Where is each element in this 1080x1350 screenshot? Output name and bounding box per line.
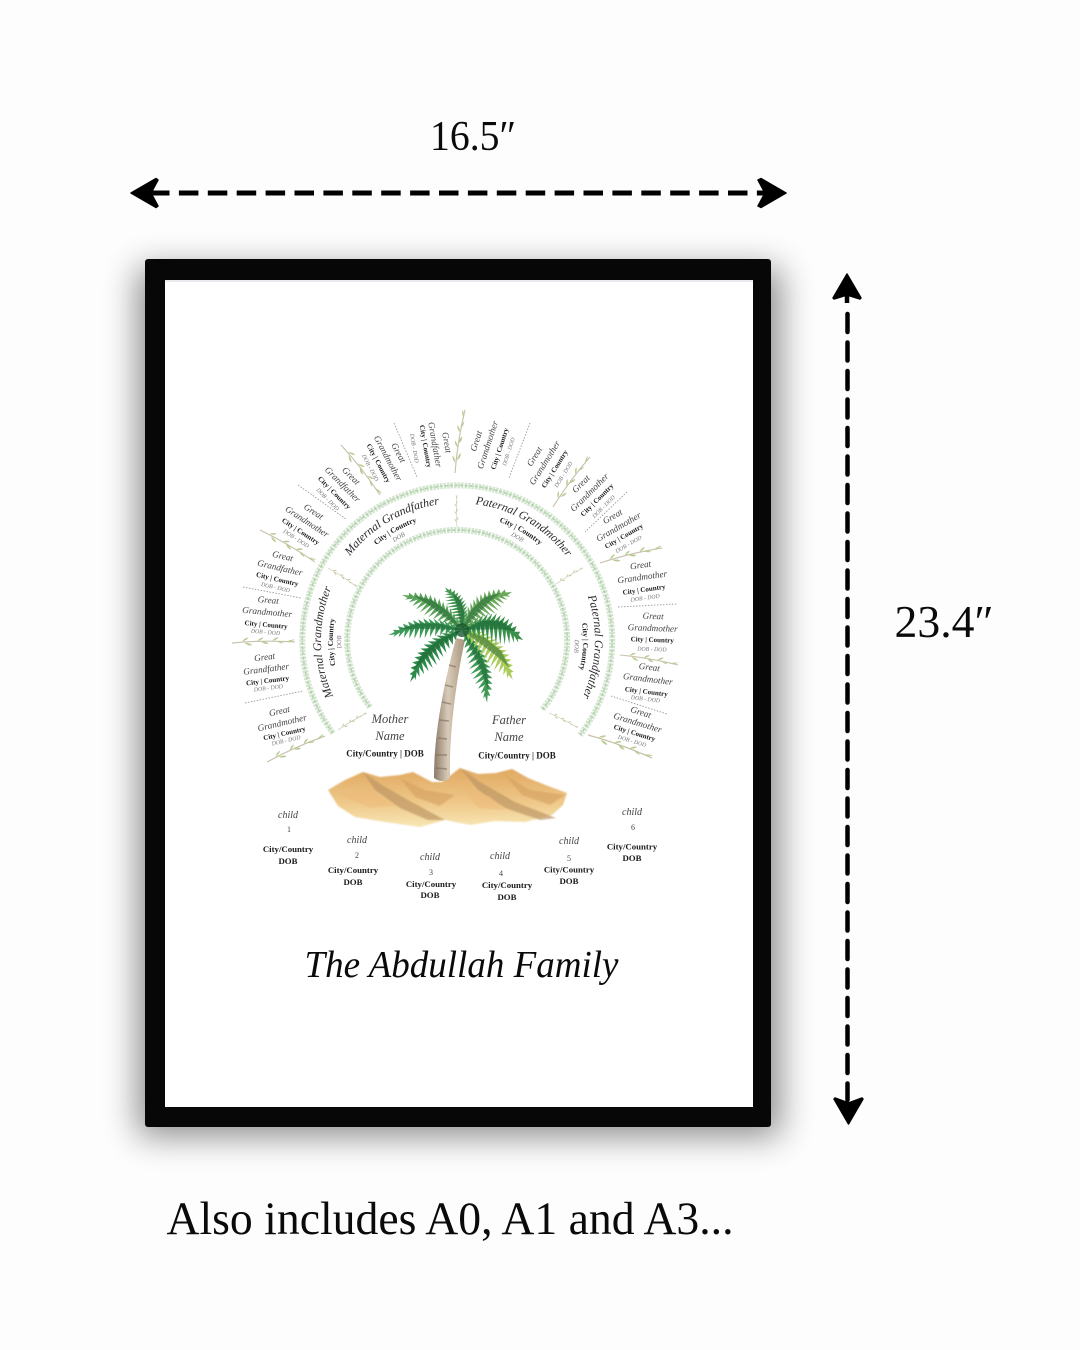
- great grandmother 10: Great: [525, 444, 545, 468]
- child 1: 1: [287, 825, 291, 834]
- child 3: DOB: [420, 890, 440, 900]
- maternal grandfather: Maternal Grandfather: [344, 498, 438, 556]
- great grandfather 6: City | Country: [316, 475, 353, 511]
- great grandmother 15: Great: [638, 661, 661, 673]
- great grandfather 4: [252, 546, 307, 596]
- great grandmother 5: Great: [302, 502, 326, 522]
- great grandmother 1: DOB - DOD: [270, 735, 302, 748]
- caption: Also includes A0, A1 and A3...: [166, 1193, 734, 1245]
- height label: 23.4″: [894, 597, 994, 647]
- child 2: child: [347, 835, 368, 846]
- child 4: child: [490, 851, 511, 862]
- arrow: width dimension: [131, 178, 786, 208]
- great grandmother 11: DOB - DOD: [591, 494, 617, 520]
- great grandmother 12: Great: [601, 507, 625, 526]
- great grandmother 16: City | Country: [613, 723, 657, 743]
- child 6: [607, 807, 658, 863]
- great grandfather 8: Grandfather: [426, 421, 444, 468]
- sand dunes: [328, 768, 567, 827]
- great grandfather 8: Great: [440, 431, 454, 454]
- great grandmother 1: Great: [268, 704, 291, 718]
- great grandfather 2: Grandfather: [243, 661, 290, 677]
- great grandmother 5: City | Country: [280, 517, 321, 547]
- great grandmother 14: [627, 610, 679, 654]
- great grandmother 1: Grandmother: [257, 712, 308, 733]
- great grandmother 14: Grandmother: [628, 622, 678, 634]
- great grandfather 8: DOB - DOD: [408, 432, 419, 464]
- child 6: child: [622, 807, 643, 818]
- poster frame: [145, 259, 771, 1127]
- great grandmother 13: [615, 557, 671, 605]
- palm fronds: [387, 577, 527, 705]
- great grandmother 3: DOB - DOD: [250, 629, 281, 637]
- child 2: DOB: [343, 877, 363, 887]
- father: Name: [493, 730, 524, 744]
- mother: City/Country | DOB: [346, 748, 424, 758]
- great grandfather 6: DOB - DOD: [314, 487, 340, 513]
- great grandmother 5: [273, 494, 338, 556]
- great grandmother 16: Great: [629, 704, 653, 720]
- great grandmother 5: Grandmother: [283, 504, 331, 540]
- great grandfather 4: Grandfather: [256, 558, 304, 578]
- inner leaf ring: [347, 530, 567, 710]
- child 6: City/Country: [607, 842, 658, 852]
- great grandmother 12: [588, 499, 653, 560]
- great grandmother 15: Grandmother: [622, 671, 674, 687]
- child 6: DOB: [622, 853, 642, 863]
- great grandmother 5: DOB - DOD: [281, 528, 310, 550]
- outer leaf ring: [302, 485, 612, 735]
- child 3: [406, 852, 457, 900]
- great grandmother 13: Grandmother: [617, 568, 668, 585]
- great grandfather 8: City | Country: [418, 424, 433, 469]
- great grandmother 16: DOB - DOD: [616, 734, 647, 749]
- maternal grandfather: DOB: [392, 532, 405, 542]
- great grandfather 2: [241, 649, 292, 695]
- great grandfather 2: Great: [254, 651, 276, 663]
- great grandmother 3: [240, 593, 294, 638]
- great grandmother 12: DOB - DOD: [614, 535, 644, 555]
- great grandfather 8: [407, 419, 456, 472]
- great grandmother 15: DOB - DOD: [629, 695, 661, 705]
- palm trunk: [434, 638, 465, 781]
- paternal grandfather: DOB: [574, 640, 580, 653]
- great grandmother 7: DOB - DOD: [360, 453, 379, 483]
- maternal grandmother: City | Country: [328, 618, 336, 666]
- great grandmother 10: [517, 432, 580, 498]
- great grandmother 1: City | Country: [263, 725, 307, 742]
- great grandfather 2: DOB - DOD: [253, 684, 284, 694]
- maternal grandmother: DOB: [336, 636, 342, 648]
- paternal grandmother: City | Country: [500, 518, 542, 545]
- child 3: child: [420, 852, 441, 863]
- great grandmother 1: [254, 700, 312, 750]
- paternal grandfather: City | Country: [578, 623, 588, 670]
- arrow: height dimension: [833, 274, 863, 1124]
- great grandmother 10: Grandmother: [527, 439, 562, 487]
- mother: [346, 712, 424, 758]
- great grandfather 4: DOB - DOD: [259, 582, 291, 595]
- great grandmother 7: City | Country: [365, 442, 392, 485]
- child 1: child: [278, 810, 299, 821]
- child 3: 3: [429, 868, 433, 877]
- great grandfather 6: Great: [340, 465, 362, 487]
- child 5: child: [559, 836, 580, 847]
- great grandmother 12: Grandmother: [594, 510, 643, 544]
- great grandmother 3: City | Country: [244, 619, 288, 631]
- great grandmother 3: Great: [257, 594, 280, 606]
- child 5: City/Country: [544, 864, 595, 874]
- width label: 16.5″: [430, 114, 516, 160]
- inner sprigs: [327, 495, 584, 731]
- palm tree: [387, 577, 527, 781]
- great grandmother 12: City | Country: [603, 522, 645, 551]
- child 3: City/Country: [406, 879, 457, 889]
- child 4: 4: [499, 869, 503, 878]
- child 2: [328, 835, 379, 887]
- child 4: City/Country: [482, 880, 533, 890]
- great grandmother 13: City | Country: [622, 583, 666, 597]
- great grandmother 10: City | Country: [540, 448, 570, 490]
- child 4: DOB: [497, 892, 517, 902]
- child 2: 2: [355, 851, 359, 860]
- outer sprigs: [232, 409, 679, 765]
- great grandfather 2: City | Country: [246, 674, 290, 687]
- maternal grandfather: City | Country: [374, 518, 416, 544]
- great grandmother 15: City | Country: [624, 685, 669, 698]
- great grandmother 14: City | Country: [631, 635, 674, 645]
- great grandmother 11: [560, 462, 624, 527]
- great grandparents: left half: [240, 419, 456, 750]
- great grandmother 9: Grandmother: [475, 419, 500, 470]
- great grandparents: right half: [464, 415, 679, 752]
- great grandmother 9: [464, 415, 520, 477]
- great grandmother 7: Grandmother: [372, 434, 404, 483]
- child 2: City/Country: [328, 865, 379, 875]
- paternal grandfather: Paternal Grandfather: [584, 595, 604, 700]
- family title: The Abdullah Family: [304, 944, 619, 986]
- children: [263, 807, 658, 902]
- great grandmother 14: Great: [642, 611, 664, 621]
- great grandmother 9: Great: [468, 429, 484, 453]
- child 1: City/Country: [263, 844, 314, 854]
- great grandmother 3: Grandmother: [242, 605, 293, 619]
- child 1: DOB: [278, 856, 298, 866]
- great grandmother 16: [607, 700, 667, 752]
- great grandmother 11: City | Country: [579, 482, 616, 518]
- maternal grandmother: Maternal Grandmother: [313, 586, 334, 698]
- great grandfather 4: Great: [271, 549, 295, 563]
- great grandmother 15: [620, 659, 675, 706]
- dotted sector dividers: [243, 423, 677, 714]
- great grandmother 13: DOB - DOD: [629, 594, 661, 604]
- great grandmother 7: Great: [389, 441, 408, 465]
- father: Father: [491, 713, 526, 727]
- paternal grandmother: Paternal Grandmother: [475, 496, 572, 554]
- child 1: [263, 810, 314, 866]
- great grandmother 11: Grandmother: [568, 471, 611, 514]
- child 5: DOB: [559, 876, 579, 886]
- mother: Name: [374, 729, 405, 743]
- great grandfather 6: [309, 456, 371, 519]
- frame shadow: [138, 268, 780, 1136]
- child 5: 5: [567, 854, 571, 863]
- great grandmother 7: [355, 428, 415, 492]
- father: [478, 713, 556, 760]
- great grandmother 9: City | Country: [489, 427, 511, 471]
- great grandfather 6: Grandfather: [323, 465, 363, 504]
- father: City/Country | DOB: [478, 750, 556, 760]
- great grandmother 16: Grandmother: [612, 711, 663, 735]
- mother: Mother: [371, 712, 409, 726]
- great grandmother 9: DOB - DOD: [502, 436, 517, 468]
- child 5: [544, 836, 595, 886]
- child 4: [482, 851, 533, 902]
- child 6: 6: [631, 823, 635, 832]
- great grandmother 14: DOB - DOD: [636, 646, 667, 654]
- great grandmother 11: Great: [570, 473, 592, 495]
- great grandfather 4: City | Country: [255, 571, 300, 588]
- paternal grandmother: DOB: [510, 532, 524, 542]
- great grandmother 13: Great: [629, 559, 652, 571]
- great grandmother 10: DOB - DOD: [553, 460, 575, 490]
